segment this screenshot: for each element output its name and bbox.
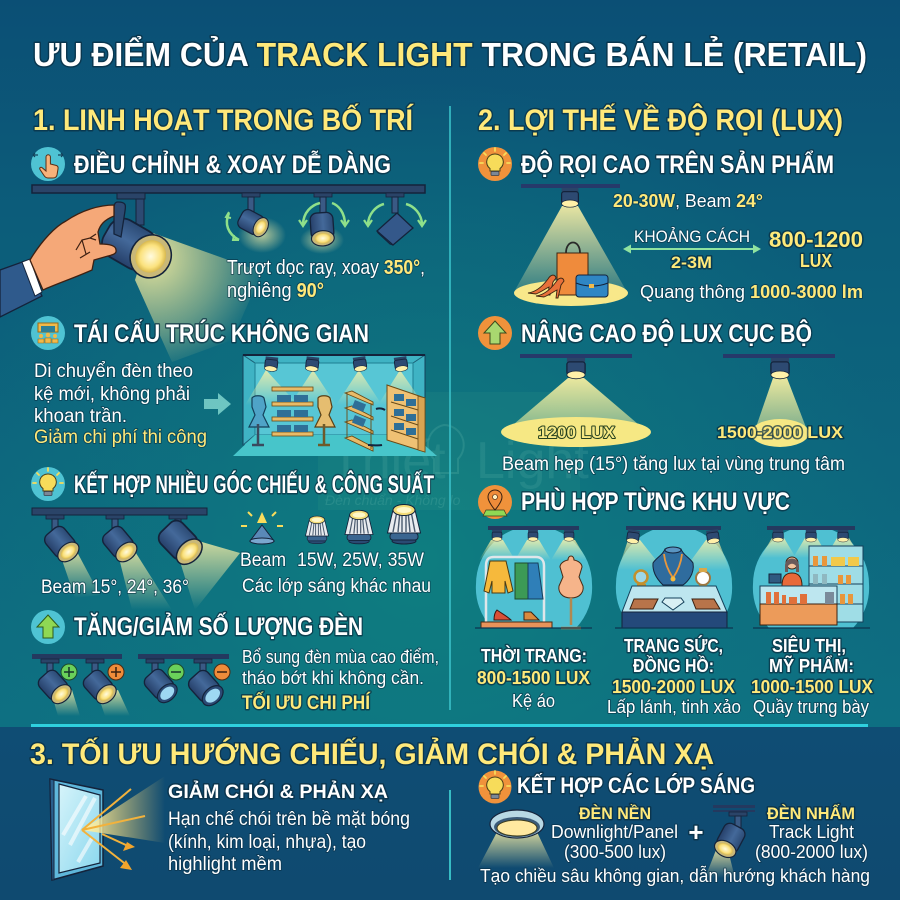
illustration: added lamps — [32, 654, 130, 716]
text: narrow beam note: Beam hẹp (15°) tăng lux tại vùng trung tâm — [502, 454, 845, 475]
watermark: Đèn chuẩn - Không lo — [325, 492, 461, 508]
text: move lamps: Giảm chi phí thi công — [34, 426, 207, 448]
text: slide rotate tilt: Trượt dọc ray, xoay 350°, — [227, 257, 425, 279]
text: powers: Các lớp sáng khác nhau — [242, 576, 431, 597]
subpanel: combine light layers — [478, 770, 870, 886]
illustration: lamp tilt left — [226, 193, 286, 253]
text: cosmetics supermarket: SIÊU THỊ, — [772, 635, 846, 656]
text: fashion: 800-1500 LUX — [477, 668, 590, 688]
text: ambient light: Downlight/Panel — [551, 822, 678, 842]
icon: orange bulb — [478, 770, 512, 804]
callout: distance: 2-3M — [671, 253, 712, 272]
illustration: three beams — [42, 515, 240, 610]
subpanel: local lux boost — [478, 316, 845, 475]
illustration: narrow beam — [717, 354, 844, 447]
track rail — [521, 184, 620, 188]
icon: light bulb — [31, 467, 65, 501]
illustration: hand adjusting big lamp — [0, 193, 179, 317]
text: depth note: Tạo chiều sâu không gian, dẫn hướng khách hàng — [480, 865, 870, 886]
text: glare reduction: Hạn chế chói trên bề mặt bóng — [168, 809, 410, 830]
text: luminous flux: Quang thông 1000-3000 lm — [640, 282, 863, 302]
text: accent light: ĐÈN NHẤM — [767, 804, 855, 823]
watermark: Thiết — [330, 432, 446, 490]
arrow: to new layout — [204, 393, 231, 415]
heading: section 1: 1. LINH HOẠT TRONG BỐ TRÍ — [33, 103, 414, 137]
watermark — [318, 392, 589, 510]
icon: 25W driver — [345, 510, 373, 544]
text: cosmetics supermarket: Quầy trưng bày — [753, 697, 869, 717]
divider: section 3 — [449, 790, 451, 880]
divider: horizontal — [31, 724, 868, 727]
text: jewelry: Lấp lánh, tinh xảo — [607, 697, 741, 717]
illustration: fashion area — [475, 526, 592, 628]
subpanel: restructure space — [31, 316, 437, 456]
heading: per zone: PHÙ HỢP TỪNG KHU VỰC — [521, 486, 790, 516]
subpanel: combine beams and powers — [31, 467, 434, 610]
text: move lamps: kệ mới, không phải — [34, 383, 190, 405]
callout: distance — [623, 227, 761, 272]
heading: section 2: 2. LỢI THẾ VỀ ĐỘ RỌI (LUX) — [478, 103, 843, 137]
icon: beam cone — [241, 512, 283, 544]
callout: lux value: LUX — [800, 251, 832, 271]
illustration: jewelry area — [615, 526, 733, 628]
illustration: cosmetics supermarket area — [753, 526, 870, 628]
text: slide rotate tilt — [227, 257, 425, 302]
text: powers — [240, 550, 431, 597]
text: cosmetics supermarket: MỸ PHẨM: — [769, 655, 854, 676]
watermark: Light — [476, 432, 589, 490]
text: glare reduction: highlight mềm — [168, 854, 282, 875]
icon: map pin — [478, 485, 512, 519]
text: accent light: Track Light — [769, 822, 854, 842]
text: jewelry — [607, 635, 741, 717]
text: slide rotate tilt: nghiêng 90° — [227, 280, 324, 302]
subpanel: adjust and rotate — [0, 147, 426, 362]
panel: section 2 lux — [475, 103, 873, 717]
text: ambient light: ĐÈN NỀN — [579, 804, 651, 823]
heading: combine layers: KẾT HỢP CÁC LỚP SÁNG — [517, 773, 755, 798]
text: accent light — [755, 804, 868, 862]
panel: section 1 flexibility — [0, 103, 439, 716]
icon: orange bulb — [478, 147, 512, 181]
text: ambient light: (300-500 lux) — [564, 842, 666, 862]
heading: restructure space: TÁI CẤU TRÚC KHÔNG GIAN — [74, 318, 369, 348]
illustration: lamp facing down — [299, 193, 349, 254]
subpanel: high lux on products — [478, 147, 863, 306]
text: add or remove lamps: TỐI ƯU CHI PHÍ — [242, 690, 371, 714]
illustration: track light — [705, 805, 755, 878]
text: move lamps: Di chuyển đèn theo — [34, 360, 193, 382]
text: accent light: (800-2000 lux) — [755, 842, 868, 862]
text: glare reduction — [168, 779, 410, 875]
text: fashion: THỜI TRANG: — [481, 645, 587, 666]
text: jewelry: TRANG SỨC, — [624, 635, 723, 656]
illustration: mirror reflection — [50, 776, 165, 880]
heading: adjust and rotate: ĐIỀU CHỈNH & XOAY DỄ DÀNG — [74, 149, 391, 179]
text: glare reduction: GIẢM CHÓI & PHẢN XẠ — [168, 779, 388, 803]
light beam from big lamp — [135, 232, 262, 362]
callout: lux value: 800-1200 — [769, 227, 863, 252]
icon: pointing hand — [31, 147, 65, 181]
heading: high lux: ĐỘ RỌI CAO TRÊN SẢN PHẨM — [521, 149, 834, 179]
subpanel: adjust number of lamps — [31, 610, 439, 716]
illustration: removed lamps — [138, 654, 230, 710]
panel: section 3 direction and glare — [30, 737, 870, 886]
text: ambient light — [551, 804, 678, 862]
illustration: beam with products — [514, 188, 628, 306]
illustration: narrow beam: 1500-2000 LUX — [717, 423, 844, 442]
text: powers: Beam — [240, 550, 286, 571]
illustration: lamp angled off — [364, 193, 426, 245]
text: fashion — [477, 645, 590, 711]
illustration: wide beam — [501, 354, 651, 447]
icon: green up arrow — [31, 610, 65, 644]
callout: lux value — [769, 227, 863, 271]
subpanel: per-zone lux — [475, 485, 873, 717]
icon: orange up arrow — [478, 316, 512, 350]
text: jewelry: ĐỒNG HỒ: — [633, 655, 714, 676]
illustration: wide beam: 1200 LUX — [538, 423, 616, 442]
plus sign: + — [688, 817, 704, 847]
callout: distance: KHOẢNG CÁCH — [634, 227, 750, 246]
text: move lamps: khoan trần. — [34, 405, 127, 427]
text: add or remove lamps: tháo bớt khi không cần. — [242, 667, 424, 688]
icon: 35W driver — [388, 504, 420, 544]
text: add or remove lamps: Bổ sung đèn mùa cao điểm, — [242, 646, 439, 667]
track rail — [32, 185, 425, 193]
heading: number of lamps: TĂNG/GIẢM SỐ LƯỢNG ĐÈN — [74, 611, 363, 641]
text: fashion: Kệ áo — [512, 691, 555, 711]
text: jewelry: 1500-2000 LUX — [612, 677, 735, 697]
heading: local lux: NÂNG CAO ĐỘ LUX CỤC BỘ — [521, 318, 812, 348]
text: power and beam: 20-30W, Beam 24° — [613, 191, 763, 211]
icon: store layout — [31, 316, 65, 350]
text: beams: Beam 15°, 24°, 36° — [41, 577, 189, 598]
illustration: downlight panel — [478, 810, 554, 868]
text: cosmetics supermarket — [751, 635, 873, 717]
text: add or remove lamps — [242, 646, 439, 714]
icon: 15W driver — [305, 516, 329, 544]
track rail — [32, 508, 207, 515]
heading: combine beams: KẾT HỢP NHIỀU GÓC CHIẾU & CÔNG SUẤT — [74, 469, 434, 499]
heading: section 3: 3. TỐI ƯU HƯỚNG CHIẾU, GIẢM CHÓI & PHẢN XẠ — [30, 737, 714, 771]
text: powers: 15W, 25W, 35W — [297, 550, 424, 571]
text: glare reduction: (kính, kim loại, nhựa), tạo — [168, 832, 366, 853]
text: move lamps — [34, 360, 207, 448]
divider: vertical center — [449, 106, 451, 710]
illustration: retail store — [233, 354, 437, 456]
text: cosmetics supermarket: 1000-1500 LUX — [751, 677, 873, 697]
title: ƯU ĐIỂM CỦA TRACK LIGHT TRONG BÁN LẺ (RETAIL) — [33, 36, 867, 73]
